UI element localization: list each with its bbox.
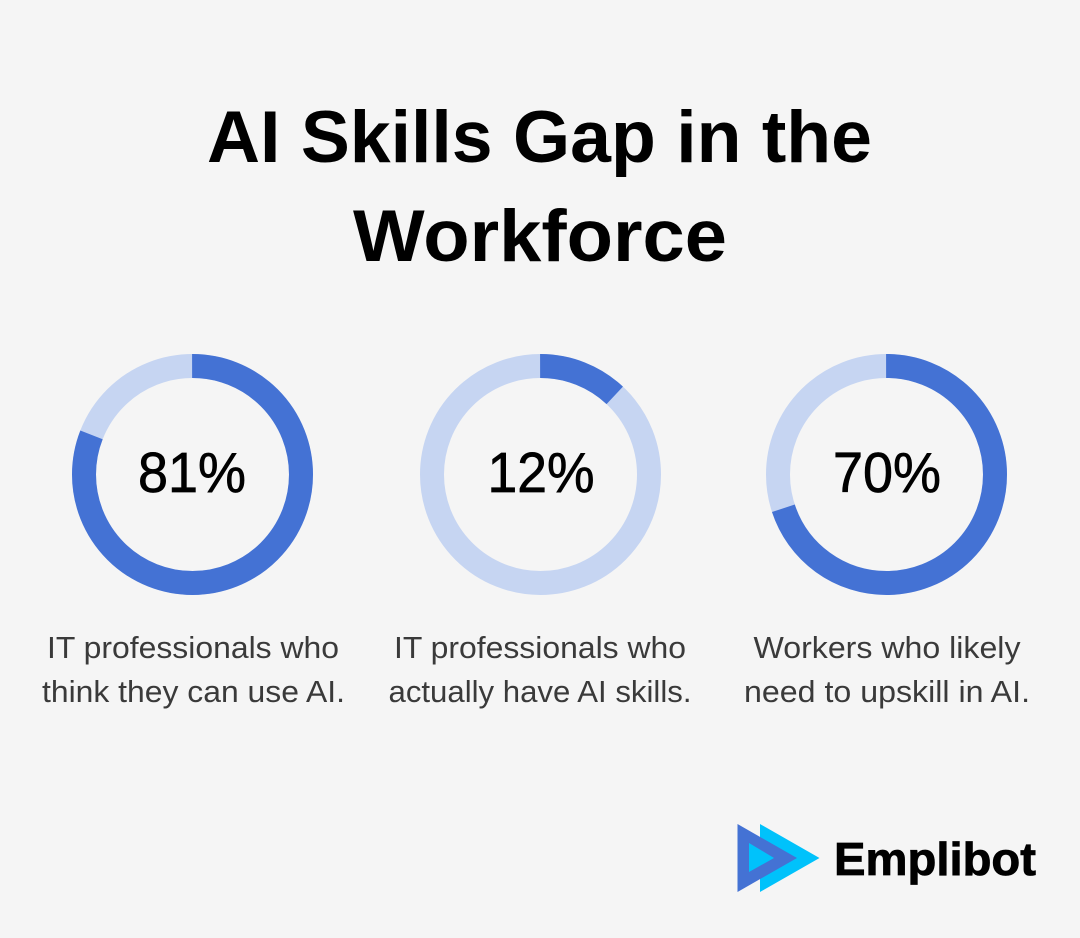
caption: 70% bbox=[744, 630, 1030, 709]
title bbox=[207, 97, 872, 277]
donut chart: 81% bbox=[84, 366, 301, 583]
logo wordmark: Emplibot bbox=[834, 833, 1036, 885]
panel: 70% stat bbox=[744, 366, 1030, 709]
logo: Emplibot bbox=[738, 824, 1036, 892]
panel: 12% stat bbox=[388, 366, 692, 709]
value: 12%: 12% bbox=[488, 441, 594, 505]
caption: 12%: actually have AI skills. bbox=[388, 674, 692, 709]
caption: 81% bbox=[42, 630, 345, 709]
caption: 12%: IT professionals who bbox=[394, 630, 686, 665]
caption: 81%: think they can use AI. bbox=[42, 674, 345, 709]
donut chart: 12% bbox=[432, 366, 649, 583]
donut chart: 70% bbox=[778, 366, 995, 583]
icon: play triangles bbox=[738, 824, 820, 892]
title: AI Skills Gap in the bbox=[207, 97, 872, 178]
panel: 81% stat bbox=[42, 366, 345, 709]
value: 70%: 70% bbox=[833, 441, 941, 505]
value: 81%: 81% bbox=[138, 441, 246, 505]
title: Workforce bbox=[353, 196, 727, 277]
caption: 81%: IT professionals who bbox=[47, 630, 339, 665]
caption: 70%: need to upskill in AI. bbox=[744, 674, 1030, 709]
caption: 70%: Workers who likely bbox=[754, 630, 1021, 665]
caption: 12% bbox=[388, 630, 692, 709]
